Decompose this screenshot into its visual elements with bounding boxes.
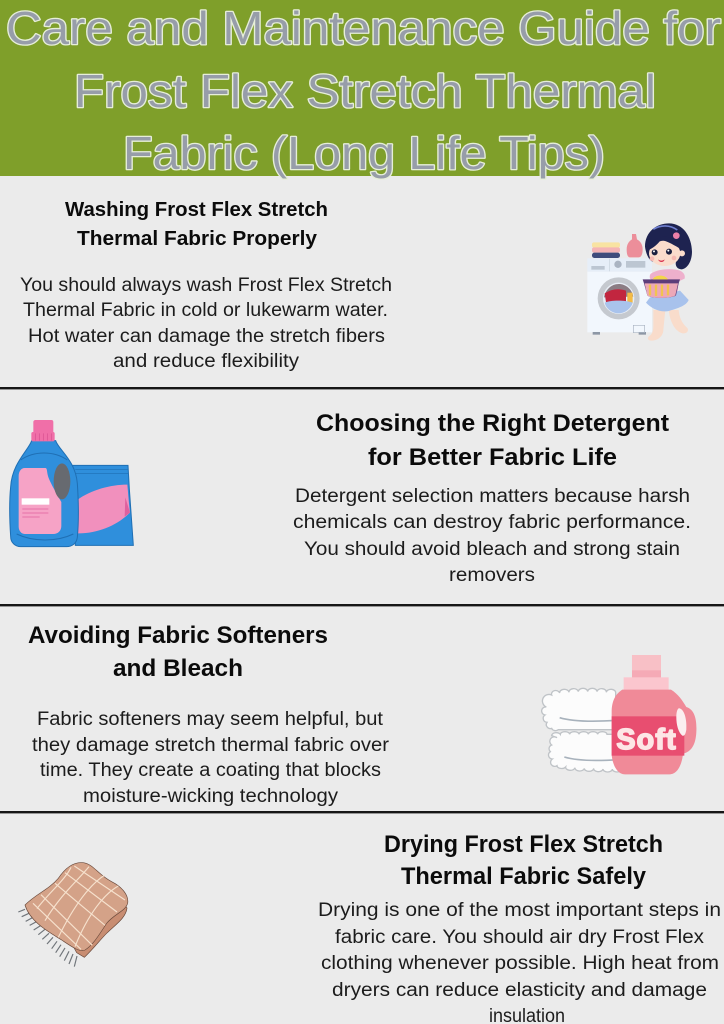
title banner: Fabric (Long Life Tips) (123, 127, 605, 179)
text block: softeners (32, 709, 390, 807)
text block: drying (318, 900, 721, 1024)
text block: washing: You should always wash Frost Flex Stretch (20, 275, 392, 296)
text block: washing: and reduce flexibility (113, 351, 300, 372)
panel: drying (18, 831, 721, 1024)
panel: washing (20, 198, 692, 372)
heading: drying: Drying Frost Flex Stretch (384, 831, 663, 858)
text block: softeners: time. They create a coating that blocks (40, 760, 381, 781)
text block: detergent: chemicals can destroy fabric performance. (293, 512, 691, 533)
heading: softeners: Avoiding Fabric Softeners (28, 622, 328, 649)
icon: folded plaid blanket (18, 863, 128, 967)
text block: drying: dryers can reduce elasticity and damage (332, 980, 707, 1001)
text block: softeners: they damage stretch thermal fabric over (32, 735, 390, 756)
heading: detergent: for Better Fabric Life (368, 444, 617, 471)
text block: detergent: Detergent selection matters because harsh (295, 486, 690, 507)
panel: detergent (10, 410, 691, 586)
text block: detergent (293, 486, 691, 586)
title banner: Care and Maintenance Guide for (6, 2, 721, 54)
icon: girl doing laundry (587, 223, 692, 341)
panel: softeners (28, 622, 696, 807)
heading: softeners: and Bleach (113, 655, 243, 682)
text block: softeners: Fabric softeners may seem helpful, but (37, 709, 384, 730)
text block: drying: clothing whenever possible. High heat from (321, 953, 719, 974)
heading: washing: Thermal Fabric Properly (77, 227, 318, 250)
text block: detergent: You should avoid bleach and strong stain (304, 539, 680, 560)
heading: washing: Washing Frost Flex Stretch (65, 198, 328, 221)
text block: detergent: removers (449, 565, 535, 586)
text block: washing: Thermal Fabric in cold or lukewarm water. (23, 300, 388, 321)
text block: washing: Hot water can damage the stretch fibers (28, 326, 385, 347)
heading: drying (384, 831, 663, 890)
heading: drying: Thermal Fabric Safely (401, 863, 647, 890)
text block: drying: Drying is one of the most important steps in (318, 900, 721, 921)
heading: detergent (316, 410, 669, 471)
icon: towels and softener bottle: Soft (616, 724, 676, 756)
text block: drying: fabric care. You should air dry Frost Flex (335, 927, 705, 948)
icon: towels and softener bottle (542, 655, 696, 774)
text block: softeners: moisture-wicking technology (83, 786, 339, 807)
heading: softeners (28, 622, 328, 682)
title banner (0, 0, 724, 179)
heading: detergent: Choosing the Right Detergent (316, 410, 669, 437)
title banner: Frost Flex Stretch Thermal (74, 65, 656, 117)
heading: washing (65, 198, 328, 250)
text block: washing (20, 275, 392, 372)
icon: detergent bottle and pouch (10, 420, 133, 547)
